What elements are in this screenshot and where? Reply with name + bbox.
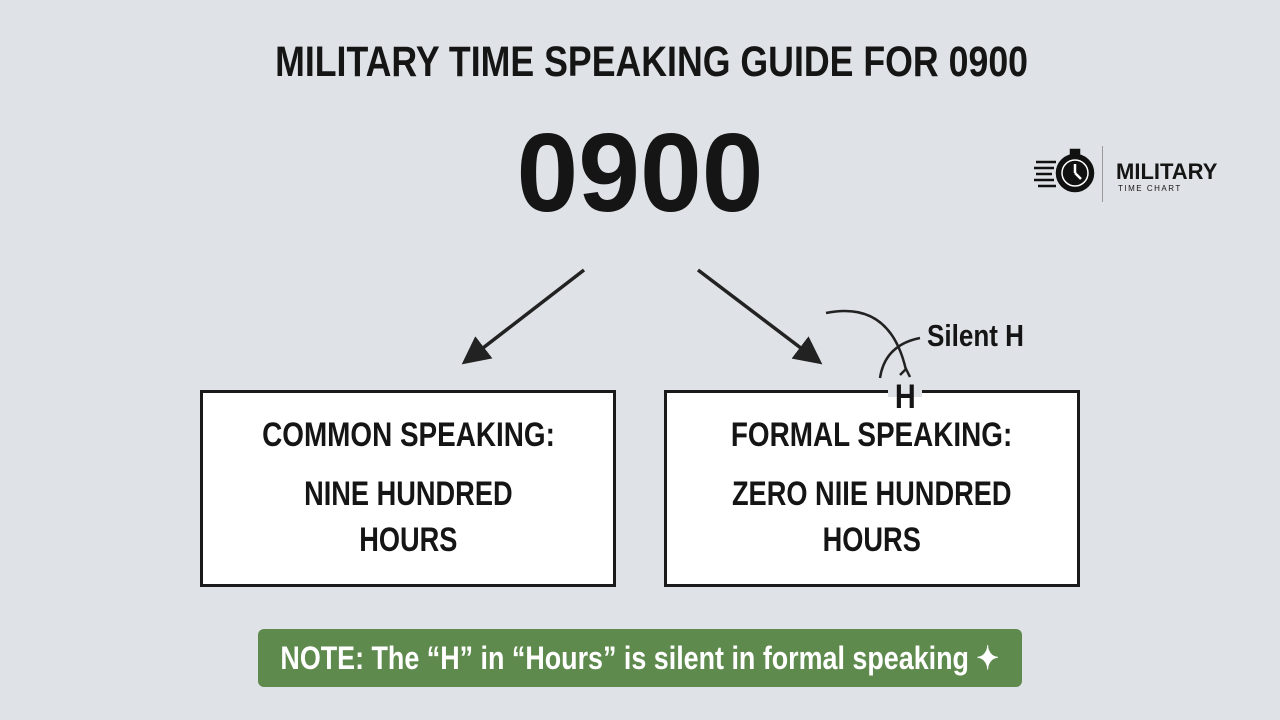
note bar [258,629,1022,687]
logo: TIME CHART [1118,184,1182,193]
panel: common [200,390,616,587]
panel: common: COMMON SPEAKING: [262,416,554,454]
panel: common: NINE HUNDRED [304,475,512,513]
panel: common: HOURS [359,521,457,559]
logo: MILITARY [1116,159,1217,184]
note bar: NOTE: The “H” in “Hours” is silent in formal speaking ✦ [281,640,999,676]
panel: formal [664,390,1080,587]
big time: 0900 [517,111,763,235]
panel: formal: FORMAL SPEAKING: [731,416,1013,454]
title: MILITARY TIME SPEAKING GUIDE FOR 0900 [275,38,1028,86]
logo [1034,146,1217,202]
panel: formal: ZERO NIIE HUNDRED [732,475,1012,513]
silent H label: Silent H [927,318,1024,353]
panel: formal: HOURS [823,521,921,559]
H marker: H [895,378,915,416]
H marker [888,378,922,416]
